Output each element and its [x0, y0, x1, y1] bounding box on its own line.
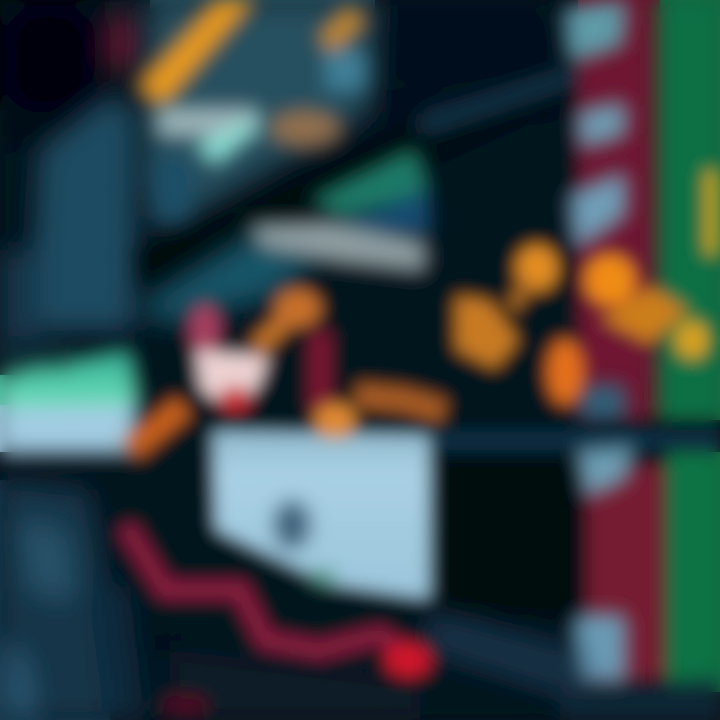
- panel: right column blue patches: [565, 0, 625, 420]
- chart line: red lower squiggle: [125, 525, 432, 717]
- panel: lower left diagonal strips: [0, 480, 580, 720]
- panel: central pale screen: [212, 430, 430, 600]
- panel: right red and green columns, lower: [586, 452, 720, 692]
- panel: right red and green columns, upper: [578, 0, 720, 420]
- chart line: red and white peak: [189, 304, 332, 415]
- chart highlight: pale streaks: [155, 108, 262, 220]
- icon: dark spot on screen: [274, 501, 336, 585]
- panel: upper chart screen: [138, 0, 375, 230]
- panel: dark upper left corner: [0, 0, 560, 120]
- panel: lower right blue patches: [560, 445, 720, 720]
- chart line: orange trend: [130, 170, 720, 450]
- panel: pale streak and teal sweep: [140, 222, 425, 325]
- panel: left blue column: [0, 0, 140, 350]
- diagonal dark band: [135, 50, 600, 290]
- panel: bright left block: [0, 340, 138, 452]
- panel: teal and blue block: [310, 148, 430, 235]
- panel: black central column: [440, 460, 575, 615]
- chart line: orange stroke: [138, 0, 365, 146]
- panel: horizontal dark band: [430, 420, 720, 450]
